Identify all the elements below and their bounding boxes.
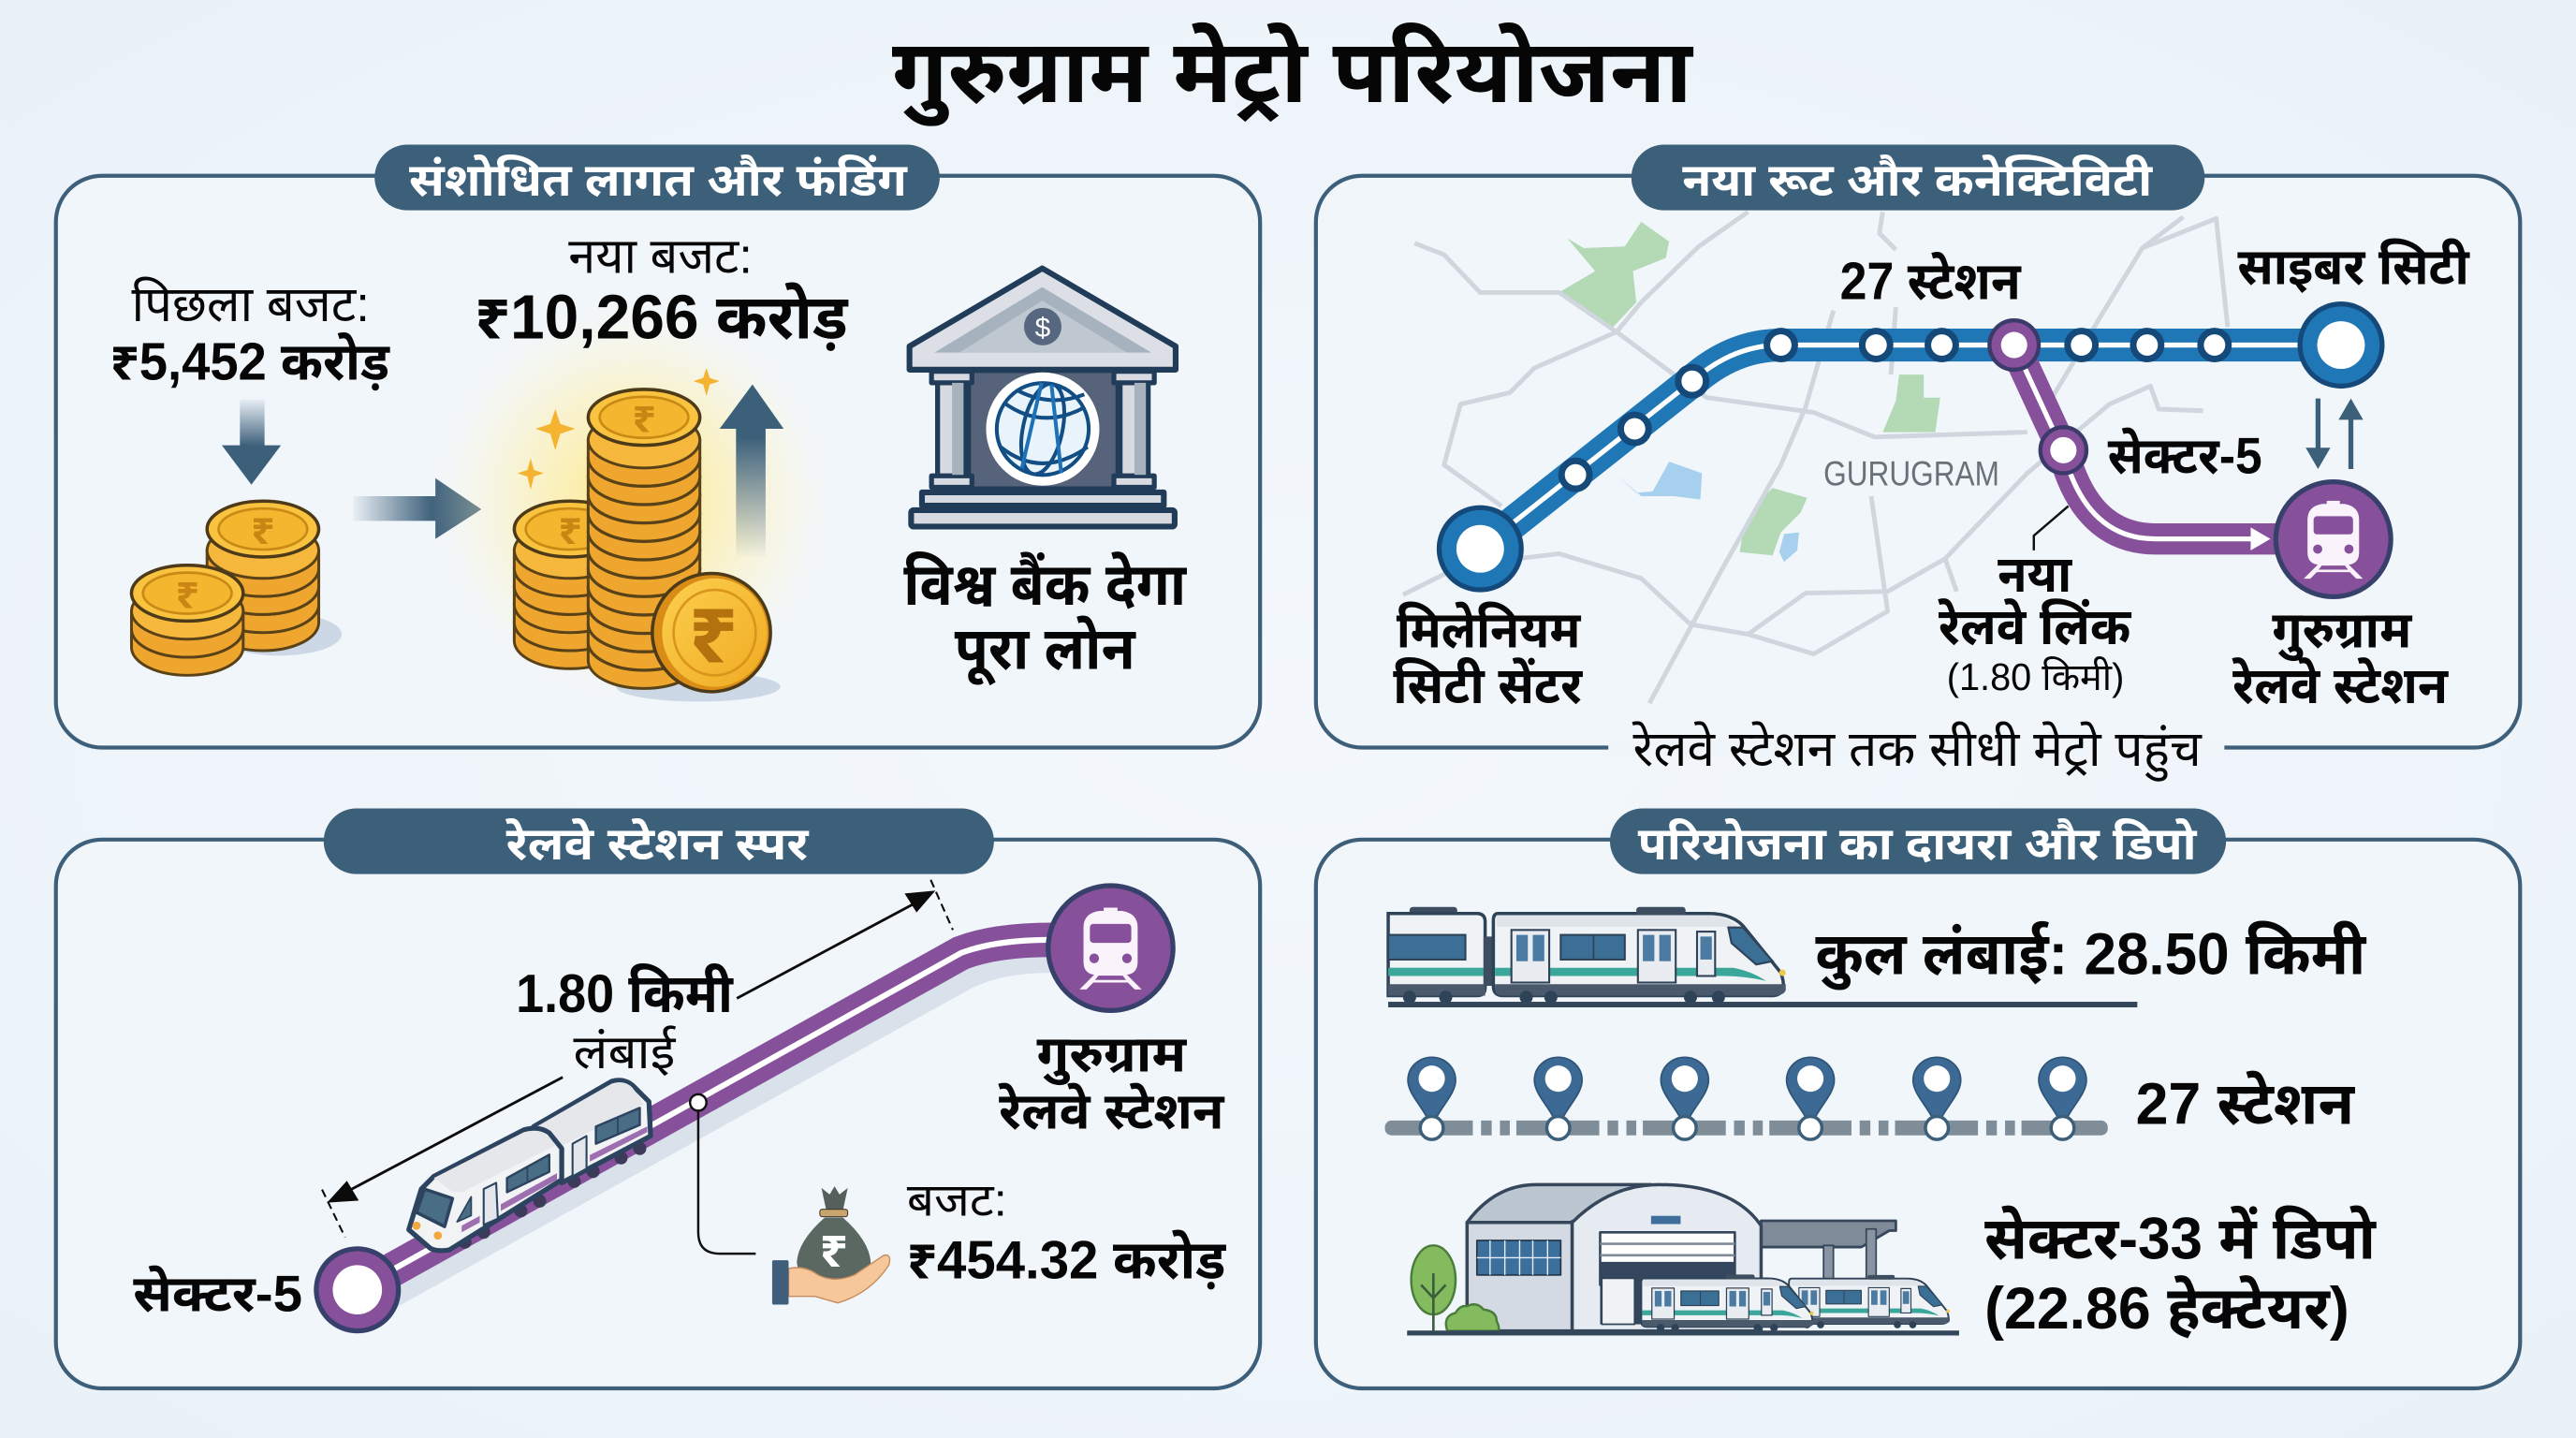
icon: large coin stacks with glow xyxy=(427,296,838,707)
text: 27 stations: 27 स्टेशन xyxy=(2136,1070,2355,1137)
icon: money bag in hand xyxy=(772,1186,890,1304)
station: interchange xyxy=(1989,320,2039,370)
labels: route text: रेलवे लिंक xyxy=(1938,598,2131,655)
station: sector 5 xyxy=(2041,427,2086,473)
title: गुरुग्राम मेट्रो परियोजना xyxy=(892,22,1694,126)
labels: spur text: गुरुग्राम xyxy=(1036,1025,1188,1086)
icon: small coin stacks: ₹ xyxy=(176,571,199,617)
icon: large coin stacks with glow: ₹ xyxy=(559,507,582,553)
text: world bank loan: विश्व बैंक देगा xyxy=(903,551,1187,618)
icon: world bank building xyxy=(910,269,1176,526)
text: world bank loan: पूरा लोन xyxy=(955,616,1136,685)
station: millennium city xyxy=(1439,507,1521,590)
icon: world bank building: $ xyxy=(1035,313,1051,344)
panel: project scope and depot xyxy=(1316,808,2520,1388)
text: world bank loan xyxy=(903,551,1187,685)
icon: metro depot xyxy=(1407,1184,1959,1335)
labels: spur text: लंबाई xyxy=(574,1025,677,1078)
route: blue metro line xyxy=(1480,345,2341,549)
icon: small coin stacks xyxy=(131,501,342,675)
icon: money bag in hand: ₹ xyxy=(820,1223,848,1278)
icon: gurugram railway station xyxy=(2276,482,2391,596)
labels: spur text: रेलवे स्टेशन xyxy=(998,1083,1225,1140)
heading: new route xyxy=(1632,144,2204,211)
labels: route text: सिटी सेंटर xyxy=(1393,657,1583,714)
arrow: budget increase xyxy=(353,478,481,539)
label: gurugram: GURUGRAM xyxy=(1823,455,1999,493)
icon: metro train on rail xyxy=(1388,907,2137,1007)
panel: revised cost and funding xyxy=(56,144,1260,748)
heading: scope: परियोजना का दायरा और डिपो xyxy=(1638,817,2198,870)
text: new budget: नया बजट: xyxy=(568,228,753,284)
route: spur line xyxy=(357,940,1053,1308)
text: total length: कुल लंबाई: 28.50 किमी xyxy=(1815,921,2367,990)
labels: route text: (1.80 किमी) xyxy=(1947,655,2124,698)
arrow: down to small coins xyxy=(222,399,281,485)
heading: spur xyxy=(324,808,994,874)
heading: revised cost xyxy=(374,144,940,211)
text: depot xyxy=(1984,1205,2377,1342)
panel: new route and connectivity xyxy=(1316,144,2520,782)
heading: scope xyxy=(1610,808,2226,874)
arrow: up xyxy=(720,385,783,559)
text: depot: (22.86 हेक्टेयर) xyxy=(1984,1275,2349,1342)
labels: route text xyxy=(1393,239,2470,714)
labels: route text: नया xyxy=(1998,546,2072,603)
text: previous budget xyxy=(110,276,390,390)
icon: large coin stacks with glow: ₹ xyxy=(689,585,738,681)
caption: direct metro access: रेलवे स्टेशन तक सीधी मेट्रो पहुंच xyxy=(1632,721,2203,782)
labels: spur text xyxy=(133,963,1226,1323)
text: previous budget: पिछला बजट: xyxy=(131,276,370,332)
labels: spur text: ₹454.32 करोड़ xyxy=(907,1229,1226,1290)
stations: blue line stops xyxy=(1561,331,2229,489)
labels: route text: मिलेनियम xyxy=(1397,601,1582,658)
heading: revised cost: संशोधित लागत और फंडिंग xyxy=(409,154,909,206)
map: roads and green areas xyxy=(1403,212,2228,703)
labels: route text: 27 स्टेशन xyxy=(1840,251,2022,310)
arrows: two-way link xyxy=(2305,399,2364,469)
leader line: railway link xyxy=(2034,506,2069,550)
labels: spur text: 1.80 किमी xyxy=(516,963,734,1024)
labels: spur text: सेक्टर-5 xyxy=(133,1266,302,1323)
text: new budget xyxy=(475,228,849,353)
icon: station pins on track xyxy=(1385,1057,2108,1139)
heading: spur: रेलवे स्टेशन स्पर xyxy=(505,817,810,870)
icon: isometric train xyxy=(409,1080,651,1251)
labels: route text: गुरुग्राम xyxy=(2272,601,2413,662)
labels: route text: रेलवे स्टेशन xyxy=(2232,657,2450,714)
dimension: length arrows xyxy=(322,880,953,1238)
labels: route text: सेक्टर-5 xyxy=(2108,427,2262,484)
station: sector 5 xyxy=(316,1249,399,1331)
route: purple railway link xyxy=(2014,345,2284,550)
station: cyber city xyxy=(2300,304,2382,386)
labels: route text: साइबर सिटी xyxy=(2237,239,2470,296)
text: new budget: ₹10,266 करोड़ xyxy=(475,282,849,353)
connector: budget leader xyxy=(690,1094,755,1254)
labels: spur text: बजट: xyxy=(907,1176,1007,1226)
icon: gurugram railway station xyxy=(1048,886,1173,1010)
panel: railway station spur xyxy=(56,808,1260,1388)
heading: new route: नया रूट और कनेक्टिविटी xyxy=(1682,154,2154,206)
icon: large coin stacks with glow: ₹ xyxy=(632,396,656,442)
icon: small coin stacks: ₹ xyxy=(251,507,274,553)
text: previous budget: ₹5,452 करोड़ xyxy=(110,331,390,390)
text: depot: सेक्टर-33 में डिपो xyxy=(1984,1205,2377,1271)
